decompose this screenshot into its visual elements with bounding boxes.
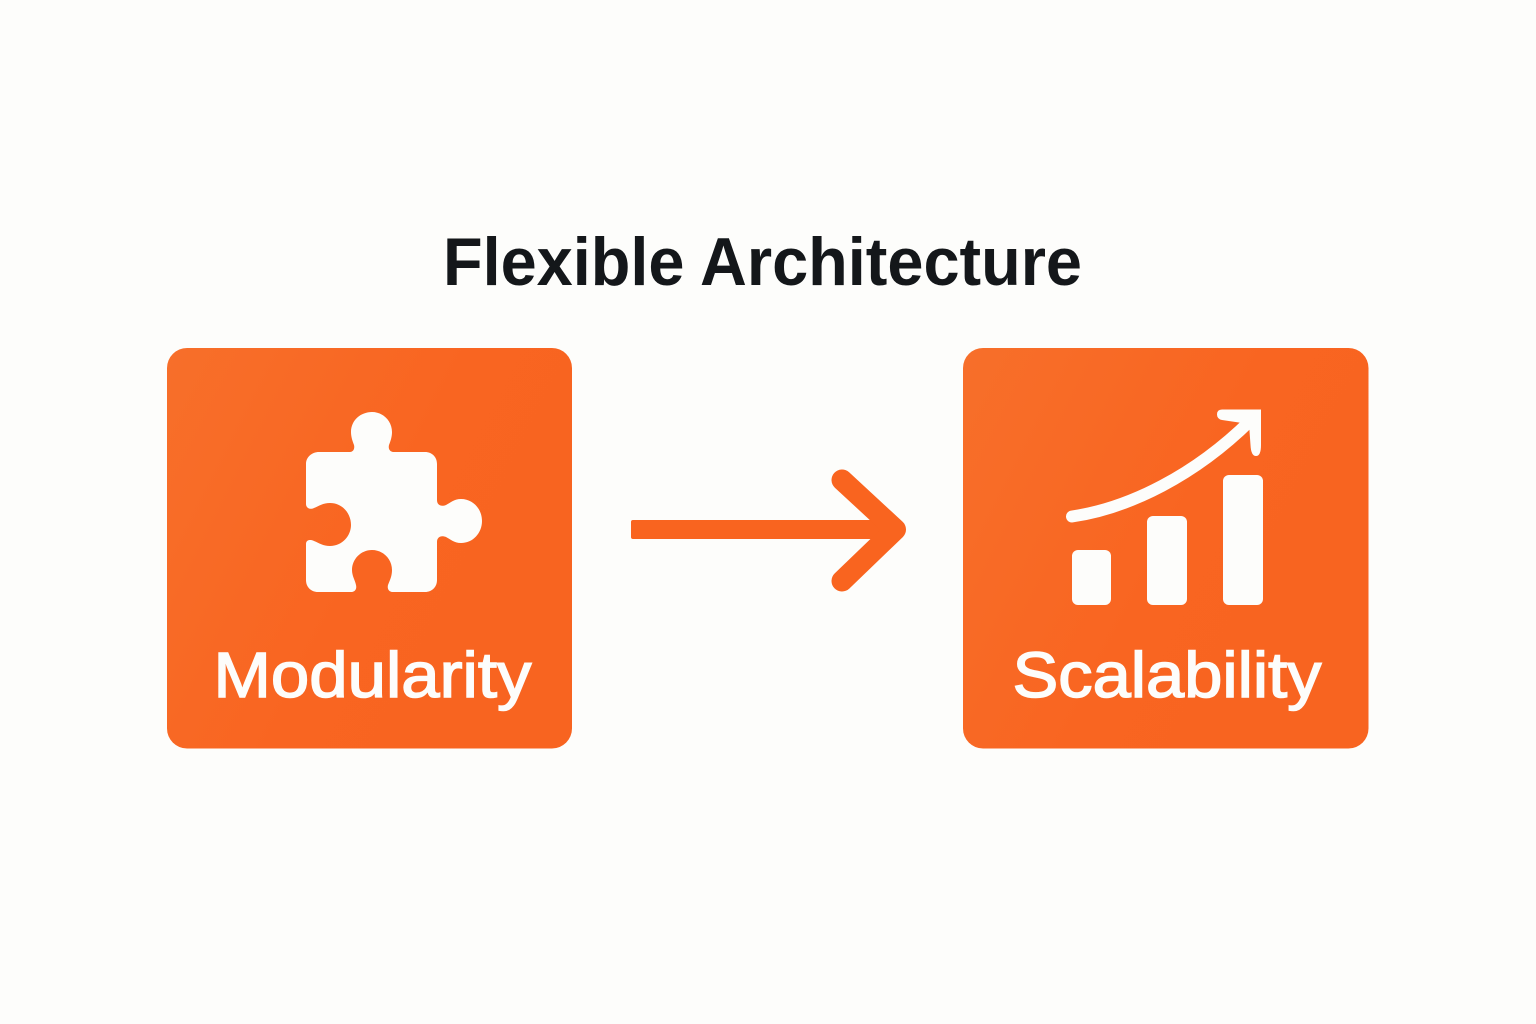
icon: growth chart [1072,410,1263,605]
label: Modularity: Modularity [214,639,532,711]
panel: scalability [963,348,1368,748]
panel: modularity [167,348,572,748]
bar: tall [1223,475,1263,605]
icon: puzzle piece [306,412,482,592]
arrow [631,480,896,581]
bar: medium [1147,516,1187,605]
label: Scalability: Scalability [1012,639,1322,711]
arrow: growth trend [1072,410,1261,516]
bar: small [1072,550,1111,605]
title: Flexible Architecture [443,224,1082,300]
